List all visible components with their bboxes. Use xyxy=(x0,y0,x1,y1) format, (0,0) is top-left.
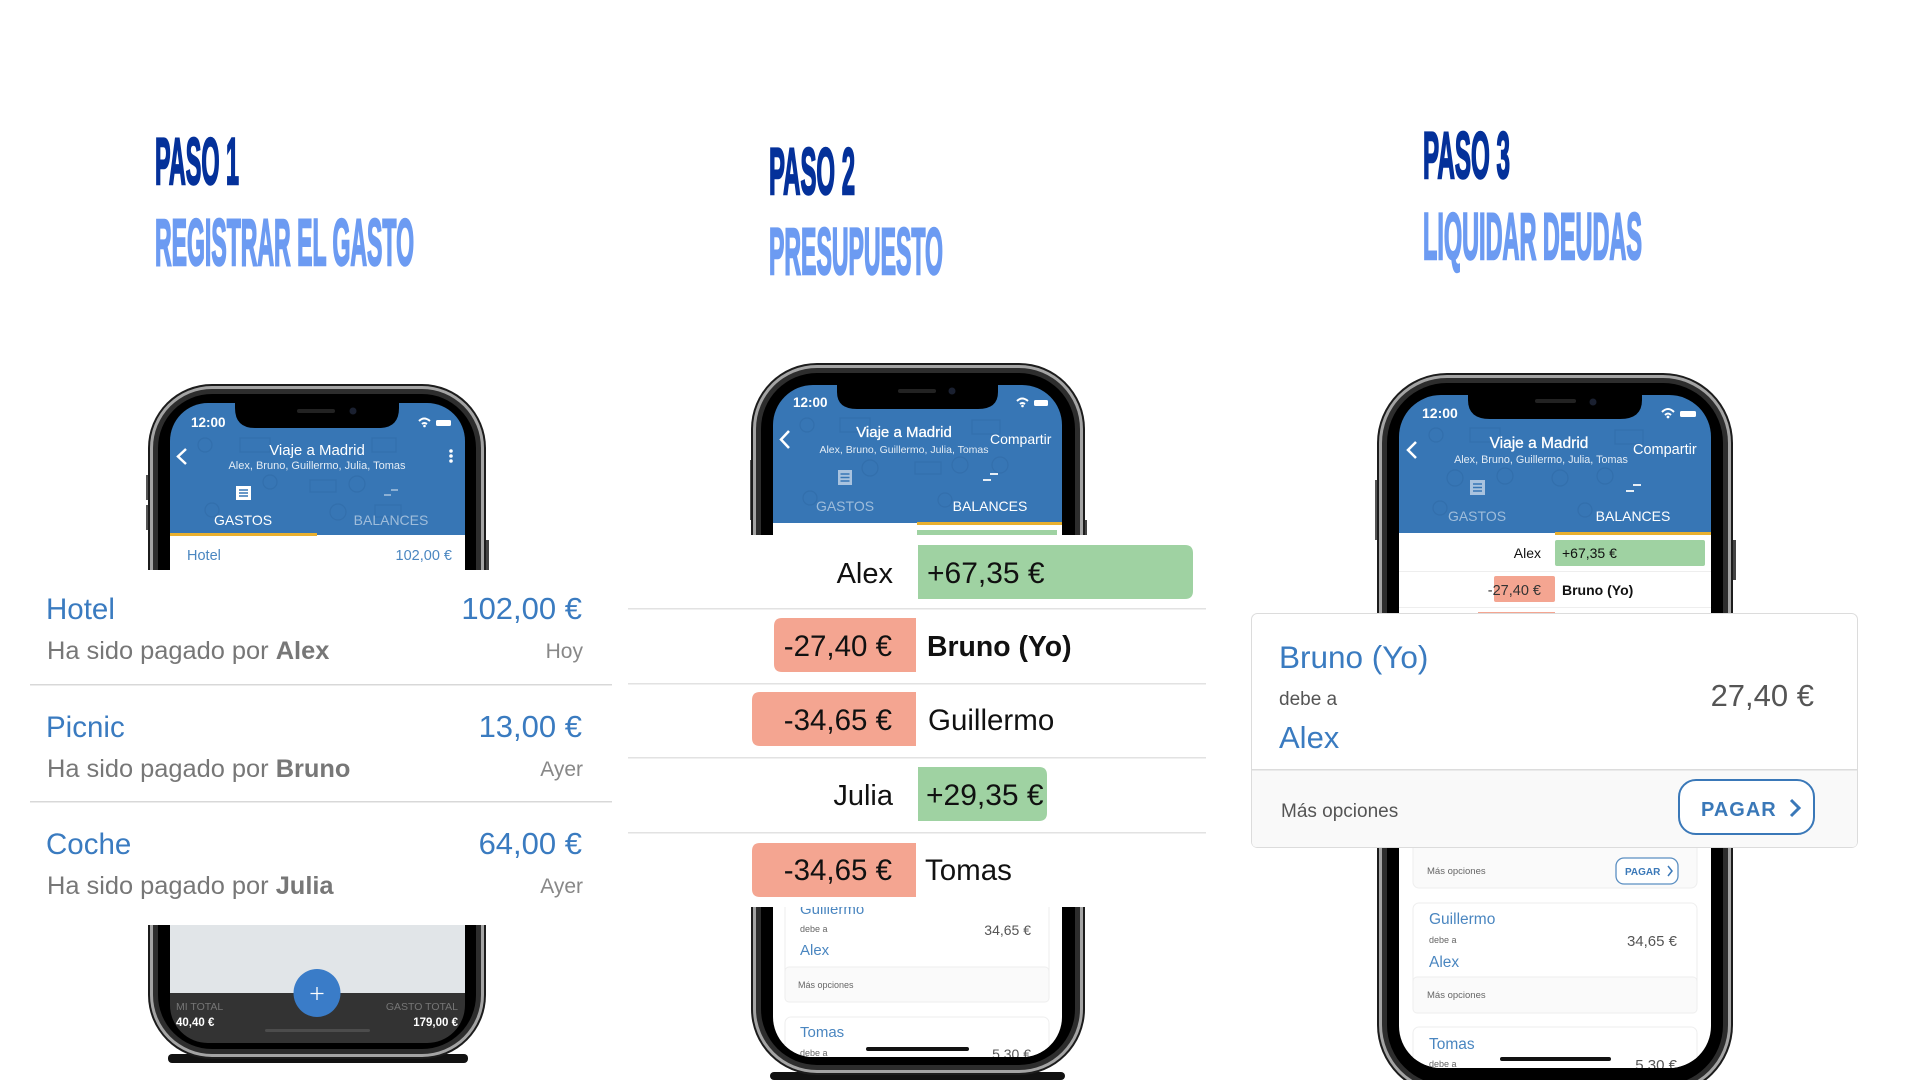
debt cards: 5,30 € xyxy=(1635,1057,1678,1074)
row: hotel: Ha sido pagado por Alex xyxy=(47,637,329,665)
debt cards peek: Alex xyxy=(800,942,830,959)
row: picnic: Ayer xyxy=(540,758,583,781)
nav title: Viaje a Madrid xyxy=(269,442,365,459)
nav title: Viaje a Madrid xyxy=(1490,435,1588,452)
hotel row peek xyxy=(187,548,452,564)
row: coche: Coche xyxy=(46,828,131,861)
row: bruno: -27,40 € xyxy=(784,630,892,663)
row: hotel: 102,00 € xyxy=(461,591,582,626)
row: picnic: 13,00 € xyxy=(479,709,582,744)
panel: expense list xyxy=(30,570,612,925)
row: hotel: Hoy xyxy=(546,640,583,663)
nav title: Alex, Bruno, Guillermo, Julia, Tomas xyxy=(819,444,989,456)
nav title xyxy=(1408,435,1697,466)
row: guillermo: -34,65 € xyxy=(784,704,892,737)
row: hotel: Hotel xyxy=(46,593,115,626)
notch xyxy=(1468,395,1642,419)
debt text xyxy=(1279,639,1814,755)
tabs: GASTOS xyxy=(816,498,874,514)
debt cards: Tomas xyxy=(1429,1036,1475,1053)
nav title: Viaje a Madrid xyxy=(856,424,952,441)
tabs: BALANCES xyxy=(354,512,428,528)
text: REGISTRAR EL GASTO xyxy=(155,205,414,279)
debt cards peek xyxy=(784,907,1050,1057)
tabs: BALANCES xyxy=(953,498,1027,514)
nav title xyxy=(178,442,453,472)
row: picnic: Picnic xyxy=(46,711,125,744)
tabs xyxy=(214,486,428,528)
mini balance rows: +67,35 € xyxy=(1562,545,1617,561)
tabs: GASTOS xyxy=(1448,508,1506,524)
row: julia: +29,35 € xyxy=(926,779,1044,812)
phone 2: balances screen xyxy=(750,363,1087,1080)
mini balance rows xyxy=(1478,540,1705,620)
nav title: Alex, Bruno, Guillermo, Julia, Tomas xyxy=(228,460,406,472)
debt text: debe a xyxy=(1279,689,1338,710)
tabs: BALANCES xyxy=(1596,508,1670,524)
debt cards peek: debe a xyxy=(800,924,828,934)
nav title: Compartir xyxy=(1633,442,1697,458)
panel: debt card xyxy=(1252,614,1858,848)
tabs: GASTOS xyxy=(214,512,272,528)
phone 3: balances and debts screen xyxy=(1375,373,1736,1080)
row: picnic: Ha sido pagado por Bruno xyxy=(47,755,350,783)
debt cards: debe a xyxy=(1429,935,1457,945)
footer totals: GASTO TOTAL xyxy=(386,1001,458,1013)
mini balance rows: -27,40 € xyxy=(1488,583,1541,599)
status bar: 12:00 xyxy=(793,395,828,410)
row: coche: Ayer xyxy=(540,875,583,898)
row: guillermo: Guillermo xyxy=(928,704,1054,737)
debt cards: 34,65 € xyxy=(1627,933,1678,950)
heading: paso 1 xyxy=(155,124,414,279)
debt cards: Más opciones xyxy=(1427,866,1486,877)
row: bruno: Bruno (Yo) xyxy=(927,631,1072,663)
heading: paso 3: PASO 3 xyxy=(1423,118,1510,192)
debt cards peek: 34,65 € xyxy=(984,922,1031,938)
pagar button: PAGAR xyxy=(1701,799,1777,821)
row: alex: +67,35 € xyxy=(927,557,1045,590)
mini balance rows: Alex xyxy=(1514,545,1541,561)
debt cards peek: 5,30 € xyxy=(992,1046,1031,1062)
footer totals: 40,40 € xyxy=(176,1017,215,1029)
phone 1: gastos screen xyxy=(146,384,489,1063)
debt cards peek: Tomas xyxy=(800,1024,844,1041)
hotel row peek: 102,00 € xyxy=(396,548,452,564)
tabs xyxy=(816,470,1027,514)
notch xyxy=(837,385,998,409)
debt text: 27,40 € xyxy=(1711,678,1814,713)
row: coche: Ha sido pagado por Julia xyxy=(47,872,334,900)
heading: paso 3 xyxy=(1423,118,1642,273)
debt cards peek: debe a xyxy=(800,1048,828,1058)
text: PRESUPUESTO xyxy=(769,214,943,288)
row: guillermo xyxy=(752,692,1054,746)
status bar xyxy=(793,395,1048,410)
debt text: Bruno (Yo) xyxy=(1279,639,1428,675)
footer totals: 179,00 € xyxy=(413,1017,459,1029)
status bar xyxy=(1422,405,1696,421)
row: alex xyxy=(837,545,1193,599)
row: julia: Julia xyxy=(833,780,894,812)
debt cards: PAGAR xyxy=(1625,867,1661,878)
debt cards: debe a xyxy=(1429,1059,1457,1069)
pagar button xyxy=(1679,780,1814,834)
tabs xyxy=(1448,480,1670,524)
row: alex: Alex xyxy=(837,558,893,590)
status bar xyxy=(191,415,451,430)
row: coche: 64,00 € xyxy=(479,826,582,861)
heading: paso 2 xyxy=(769,134,943,288)
panel: balance table xyxy=(628,535,1206,907)
heading: paso 1: PASO 1 xyxy=(155,124,239,198)
heading: paso 2: PASO 2 xyxy=(769,134,855,208)
debt cards peek: Más opciones xyxy=(798,980,854,990)
row: tomas: -34,65 € xyxy=(784,854,892,887)
debt cards xyxy=(1412,848,1698,1068)
nav title: Compartir xyxy=(990,431,1052,447)
nav title xyxy=(781,424,1052,456)
row: coche xyxy=(46,826,583,900)
nav title: Alex, Bruno, Guillermo, Julia, Tomas xyxy=(1454,454,1629,466)
more options: Más opciones xyxy=(1281,801,1398,822)
row: tomas: Tomas xyxy=(925,854,1012,887)
notch xyxy=(235,403,399,428)
hotel row peek: Hotel xyxy=(187,548,221,564)
row: julia xyxy=(833,767,1047,821)
row: tomas xyxy=(752,843,1012,897)
debt cards: Guillermo xyxy=(1429,911,1495,928)
row: picnic xyxy=(46,709,583,783)
row: hotel xyxy=(46,591,583,665)
debt cards peek: Guillermo xyxy=(800,901,864,918)
debt text: Alex xyxy=(1279,720,1340,755)
mini balance rows: Bruno (Yo) xyxy=(1562,582,1633,598)
status bar: 12:00 xyxy=(191,415,226,430)
add button xyxy=(294,969,340,1017)
footer totals xyxy=(176,1001,459,1032)
footer totals: MI TOTAL xyxy=(176,1001,223,1013)
debt cards: Alex xyxy=(1429,954,1459,971)
row: bruno xyxy=(774,618,1072,672)
debt cards: Más opciones xyxy=(1427,990,1486,1001)
status bar: 12:00 xyxy=(1422,405,1458,421)
